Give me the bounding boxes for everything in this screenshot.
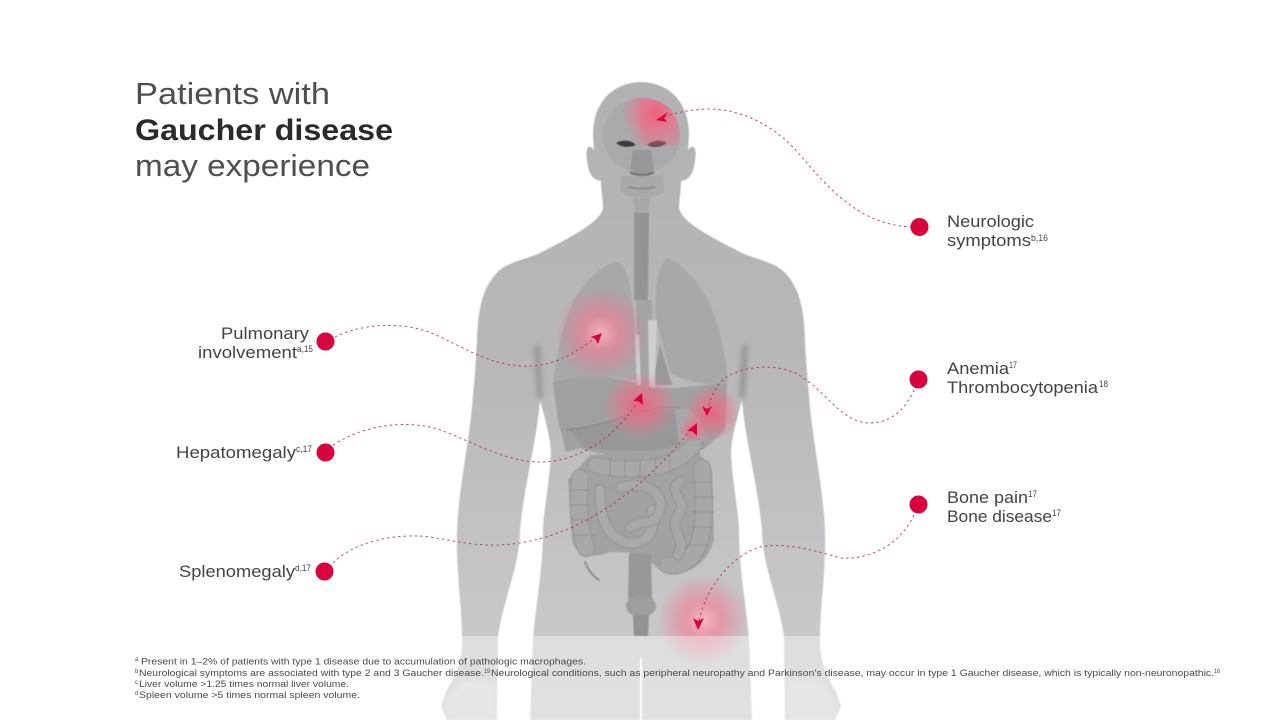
illustration: human body with organs: [441, 82, 841, 720]
label: anemia and thrombocytopenia: Anemia: [947, 359, 1010, 378]
footnotes: a: [135, 657, 139, 663]
body silhouette: [441, 82, 841, 720]
label: splenomegaly: d,17: [295, 563, 311, 573]
glow: bone: [657, 574, 749, 666]
trachea and airways: [634, 213, 655, 440]
intestines: [568, 440, 714, 636]
label: pulmonary involvement: Pulmonary: [221, 324, 310, 343]
abdominal organs: liver, stomach, spleen: [553, 376, 727, 455]
label: neurologic symptoms: [910, 212, 1048, 250]
footnotes: d: [135, 691, 138, 697]
label: anemia and thrombocytopenia: [910, 359, 1108, 397]
label: bone pain and disease: Bone disease: [947, 507, 1052, 526]
footnotes: Spleen volume >5 times normal spleen volume.: [139, 690, 360, 701]
connector: anemia and thrombocytopenia: [702, 367, 914, 423]
footnotes: b: [135, 669, 139, 675]
glow: liver: [603, 372, 677, 438]
label: anemia and thrombocytopenia: 17: [1009, 360, 1017, 370]
connector: hepatomegaly: [333, 393, 643, 462]
footnotes: Neurological symptoms are associated with type 2 and 3 Gaucher disease.: [139, 668, 484, 679]
label: anemia and thrombocytopenia: 18: [1099, 379, 1108, 389]
label: hepatomegaly: [176, 443, 334, 462]
glow: spleen arrow tip: [679, 417, 705, 443]
label: bone pain and disease: 17: [1028, 489, 1037, 499]
connector: splenomegaly: [333, 423, 697, 563]
label: neurologic symptoms: Neurologic: [947, 212, 1035, 231]
title: Patients with: [135, 76, 330, 111]
label: bone pain and disease: 17: [1052, 508, 1061, 518]
footnotes: 19: [484, 669, 491, 675]
label: pulmonary involvement: a,15: [297, 344, 313, 354]
connector: pulmonary involvement: [335, 325, 602, 366]
title: Gaucher disease: [135, 114, 393, 147]
footnotes: Present in 1–2% of patients with type 1 disease due to accumulation of pathologic macrophages.: [141, 656, 586, 668]
footnotes: Neurological conditions, such as peripheral neuropathy and Parkinson’s disease, may occur in type 1 Gaucher disease, which is typically non-neuronopathic.: [491, 668, 1214, 679]
connector: bone: [693, 515, 914, 630]
hands highlight: [446, 680, 836, 720]
connector: neurologic symptoms: [656, 109, 912, 227]
lungs: [553, 258, 727, 440]
footnotes: Liver volume >1.25 times normal liver volume.: [139, 679, 349, 690]
footnote band: [0, 636, 1280, 720]
title: [135, 76, 393, 183]
label: bone pain and disease: [910, 488, 1061, 526]
label: pulmonary involvement: involvement: [198, 343, 297, 362]
footnotes: [135, 656, 1221, 701]
label: neurologic symptoms: symptoms: [947, 231, 1031, 250]
label: neurologic symptoms: b,16: [1031, 233, 1048, 243]
title: may experience: [135, 148, 370, 183]
head and face: [603, 98, 680, 215]
glow: brain: [624, 98, 680, 146]
body shading: [537, 345, 745, 398]
label: splenomegaly: Splenomegaly: [179, 562, 296, 581]
glow: spleen: [684, 385, 740, 441]
label: bone pain and disease: Bone pain: [947, 488, 1028, 507]
label: pulmonary involvement: [198, 324, 334, 362]
label: hepatomegaly: Hepatomegaly: [176, 443, 297, 462]
glow: lung: [555, 287, 647, 379]
label: hepatomegaly: c,17: [296, 444, 312, 454]
footnotes: c: [135, 680, 138, 686]
footnotes: 16: [1214, 669, 1221, 675]
label: splenomegaly: [179, 562, 334, 581]
label: anemia and thrombocytopenia: Thrombocytopenia: [947, 378, 1099, 397]
